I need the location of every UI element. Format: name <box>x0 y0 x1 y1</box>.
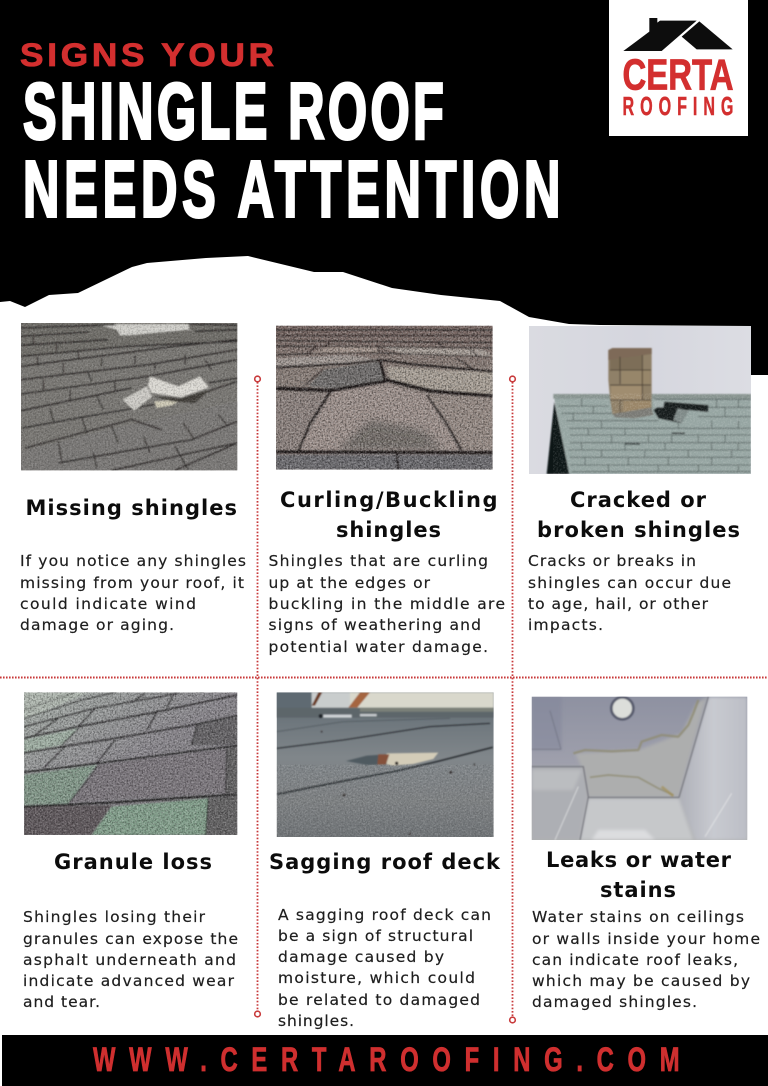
description: Shingles that are curling <box>268 552 488 570</box>
footer bar <box>2 1035 768 1086</box>
description: impacts. <box>528 616 603 634</box>
description: damage or aging. <box>20 616 174 634</box>
description: up at the edges or <box>268 574 431 592</box>
description: Shingles losing their <box>23 908 206 926</box>
heading: signs your: SIGNS YOUR <box>20 38 274 74</box>
description: and tear. <box>23 993 100 1011</box>
heading: needs attention: NEEDS ATTENTION <box>23 145 560 234</box>
heading: Missing shingles <box>26 496 237 520</box>
description: potential water damage. <box>268 638 488 656</box>
title <box>20 38 560 234</box>
heading: broken shingles <box>537 518 740 542</box>
heading: shingle roof: SHINGLE ROOF <box>23 67 444 156</box>
description: be a sign of structural <box>278 927 473 945</box>
description <box>268 552 505 656</box>
description: granules can expose the <box>23 930 238 948</box>
heading: Curling/Buckling <box>280 488 498 512</box>
description <box>278 906 491 1030</box>
heading <box>280 488 498 542</box>
description: moisture, which could <box>278 969 475 987</box>
logo <box>609 0 748 136</box>
panel: cracked or broken shingles <box>528 326 751 634</box>
description: signs of weathering and <box>268 616 481 634</box>
panel: leaks or water stains <box>532 697 760 1011</box>
description: could indicate wind <box>20 595 196 613</box>
heading: stains <box>600 878 676 902</box>
description: Water stains on ceilings <box>532 908 744 926</box>
heading <box>546 848 732 902</box>
description: shingles can occur due <box>528 574 731 592</box>
icon: roof <box>623 18 733 51</box>
heading <box>537 488 740 542</box>
description: A sagging roof deck can <box>278 906 491 924</box>
heading: shingles <box>336 518 441 542</box>
description: asphalt underneath and <box>23 951 236 969</box>
description: which may be caused by <box>532 972 750 990</box>
black torn-edge header <box>0 0 768 375</box>
description: indicate advanced wear <box>23 972 235 990</box>
panel: missing shingles <box>20 323 246 634</box>
photo: missing shingles <box>21 323 237 470</box>
logo wordmark: certa: CERTA <box>622 50 734 100</box>
photo: curling shingles <box>276 326 493 470</box>
heading: Leaks or water <box>546 848 732 872</box>
description: to age, hail, or other <box>528 595 709 613</box>
description: missing from your roof, it <box>20 574 244 592</box>
photo: sagging deck with puddle <box>277 692 494 837</box>
panel: sagging roof deck <box>269 692 501 1030</box>
photo: chimney and broken shingles <box>529 326 751 474</box>
heading: Granule loss <box>54 850 212 874</box>
description: damage caused by <box>278 948 444 966</box>
description: damaged shingles. <box>532 993 697 1011</box>
logo wordmark: roofing: ROOFING <box>622 91 733 121</box>
website url: WWW.CERTAROOFING.COM <box>93 1041 680 1079</box>
description: buckling in the middle are <box>268 595 505 613</box>
description <box>20 552 246 634</box>
description <box>532 908 760 1011</box>
panel: granule loss <box>23 692 238 1011</box>
description <box>528 552 731 634</box>
description: shingles. <box>278 1012 354 1030</box>
description: Cracks or breaks in <box>528 552 696 570</box>
dotted dividers <box>0 376 768 1023</box>
panel: curling or buckling shingles <box>268 326 505 656</box>
description: or walls inside your home <box>532 930 760 948</box>
photo: granule loss <box>24 692 237 835</box>
heading: Sagging roof deck <box>269 850 501 874</box>
heading: Cracked or <box>570 488 707 512</box>
description: be related to damaged <box>278 991 480 1009</box>
description: If you notice any shingles <box>20 552 246 570</box>
description: can indicate roof leaks, <box>532 951 738 969</box>
description <box>23 908 238 1011</box>
photo: water-stained ceiling <box>532 697 747 840</box>
